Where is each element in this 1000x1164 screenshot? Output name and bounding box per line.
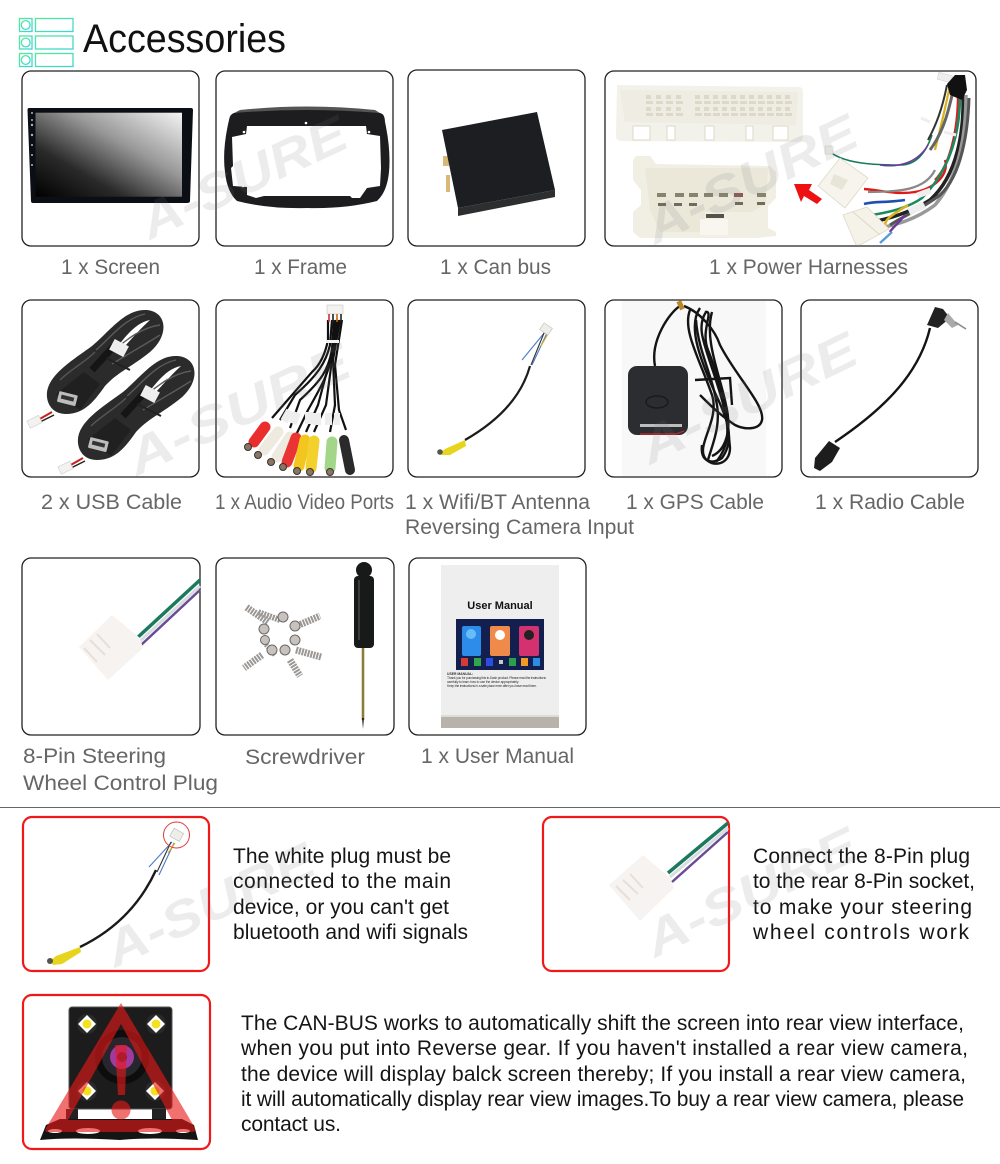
label: screen: 1 x Screen	[61, 255, 160, 279]
arrow: red	[794, 184, 822, 204]
connector: upper	[616, 85, 803, 142]
panel: user manual: USER MANUAL:	[447, 672, 473, 676]
watermarks: A-SURE	[628, 321, 868, 476]
watermarks: A-SURE	[633, 816, 868, 969]
text: can-bus note: the device will display balck screen thereby; If you install a rear view camera,	[241, 1063, 966, 1086]
text: white plug note	[233, 845, 468, 944]
label: usb cable: 2 x USB Cable	[41, 490, 182, 514]
label: wifi/bt antenna: 1 x Wifi/BT Antenna	[405, 490, 590, 514]
panel: audio video ports	[216, 300, 393, 477]
label: steering plug: 8-Pin Steering	[23, 744, 166, 768]
panel: steering plug	[22, 558, 200, 735]
icon: accessories list	[20, 18, 73, 66]
text: white plug note: bluetooth and wifi signals	[233, 921, 468, 944]
label: screwdriver: Screwdriver	[245, 745, 365, 769]
label: wifi/bt antenna: Reversing Camera Input	[405, 515, 634, 539]
panel: gps cable	[605, 300, 782, 477]
panel: power harnesses	[605, 71, 976, 246]
label: frame: 1 x Frame	[254, 255, 347, 279]
label: wifi/bt antenna	[405, 490, 634, 539]
text: white plug note: The white plug must be	[233, 845, 451, 868]
label: steering plug	[23, 744, 218, 795]
text: white plug note: device, or you can't get	[233, 896, 449, 919]
text: can-bus note	[240, 1012, 968, 1136]
watermarks: A-SURE	[94, 831, 325, 979]
text: 8-pin plug note: wheel controls work	[752, 921, 970, 944]
camera	[40, 1007, 198, 1140]
panel: user manual: Thank you for purchasing this in-Dash product. Please read the instructions	[447, 676, 546, 680]
panel: screwdriver and screws	[216, 558, 394, 735]
panel: 8-pin plug note	[543, 817, 729, 971]
panel: screen	[22, 71, 199, 246]
panel: white plug note	[23, 817, 209, 971]
panel: user manual	[409, 558, 586, 735]
label: user manual: 1 x User Manual	[421, 744, 574, 768]
label: can bus: 1 x Can bus	[440, 255, 551, 279]
panel: frame	[216, 71, 393, 246]
panel: user manual: carefully to learn how to use the device appropriately.	[447, 680, 519, 684]
label: power harnesses: 1 x Power Harnesses	[709, 255, 908, 279]
text: 8-pin plug note: to the rear 8-Pin socket,	[753, 870, 975, 893]
label: radio cable: 1 x Radio Cable	[815, 490, 965, 514]
panel: can bus	[408, 70, 585, 246]
label: gps cable: 1 x GPS Cable	[626, 490, 764, 514]
label: steering plug: Wheel Control Plug	[23, 771, 218, 795]
panel: wifi/bt antenna	[408, 300, 585, 477]
connectors: harness plugs	[818, 72, 967, 245]
label: audio video ports: 1 x Audio Video Ports	[215, 490, 394, 514]
text: white plug note: connected to the main	[233, 870, 451, 893]
panel: user manual: Keep the instructions in a safe place even after you have read them.	[447, 684, 537, 688]
watermarks	[94, 103, 868, 979]
text: can-bus note: contact us.	[241, 1113, 341, 1136]
text: can-bus note: it will automatically display rear view images.To buy a rear view camera, please	[241, 1088, 964, 1111]
panel: usb cable	[22, 300, 199, 477]
watermarks: A-SURE	[129, 105, 358, 251]
text: can-bus note: when you put into Reverse gear. If you haven't installed a rear view camera,	[240, 1037, 968, 1060]
watermarks: A-SURE	[633, 103, 868, 256]
harness wires	[826, 82, 969, 243]
icon: warning triangle	[45, 1003, 195, 1132]
text: can-bus note: The CAN-BUS works to automatically shift the screen into rear view interface,	[241, 1012, 964, 1035]
text: 8-pin plug note	[752, 845, 975, 944]
connector: lower	[633, 156, 776, 238]
title: Accessories	[83, 17, 286, 61]
text: 8-pin plug note: Connect the 8-Pin plug	[753, 845, 970, 868]
panel: user manual: User Manual	[467, 600, 533, 612]
panel: radio cable	[801, 300, 978, 477]
text: 8-pin plug note: to make your steering	[753, 896, 972, 919]
panel: rear view camera warning	[23, 995, 210, 1149]
watermarks: A-SURE	[116, 333, 361, 487]
